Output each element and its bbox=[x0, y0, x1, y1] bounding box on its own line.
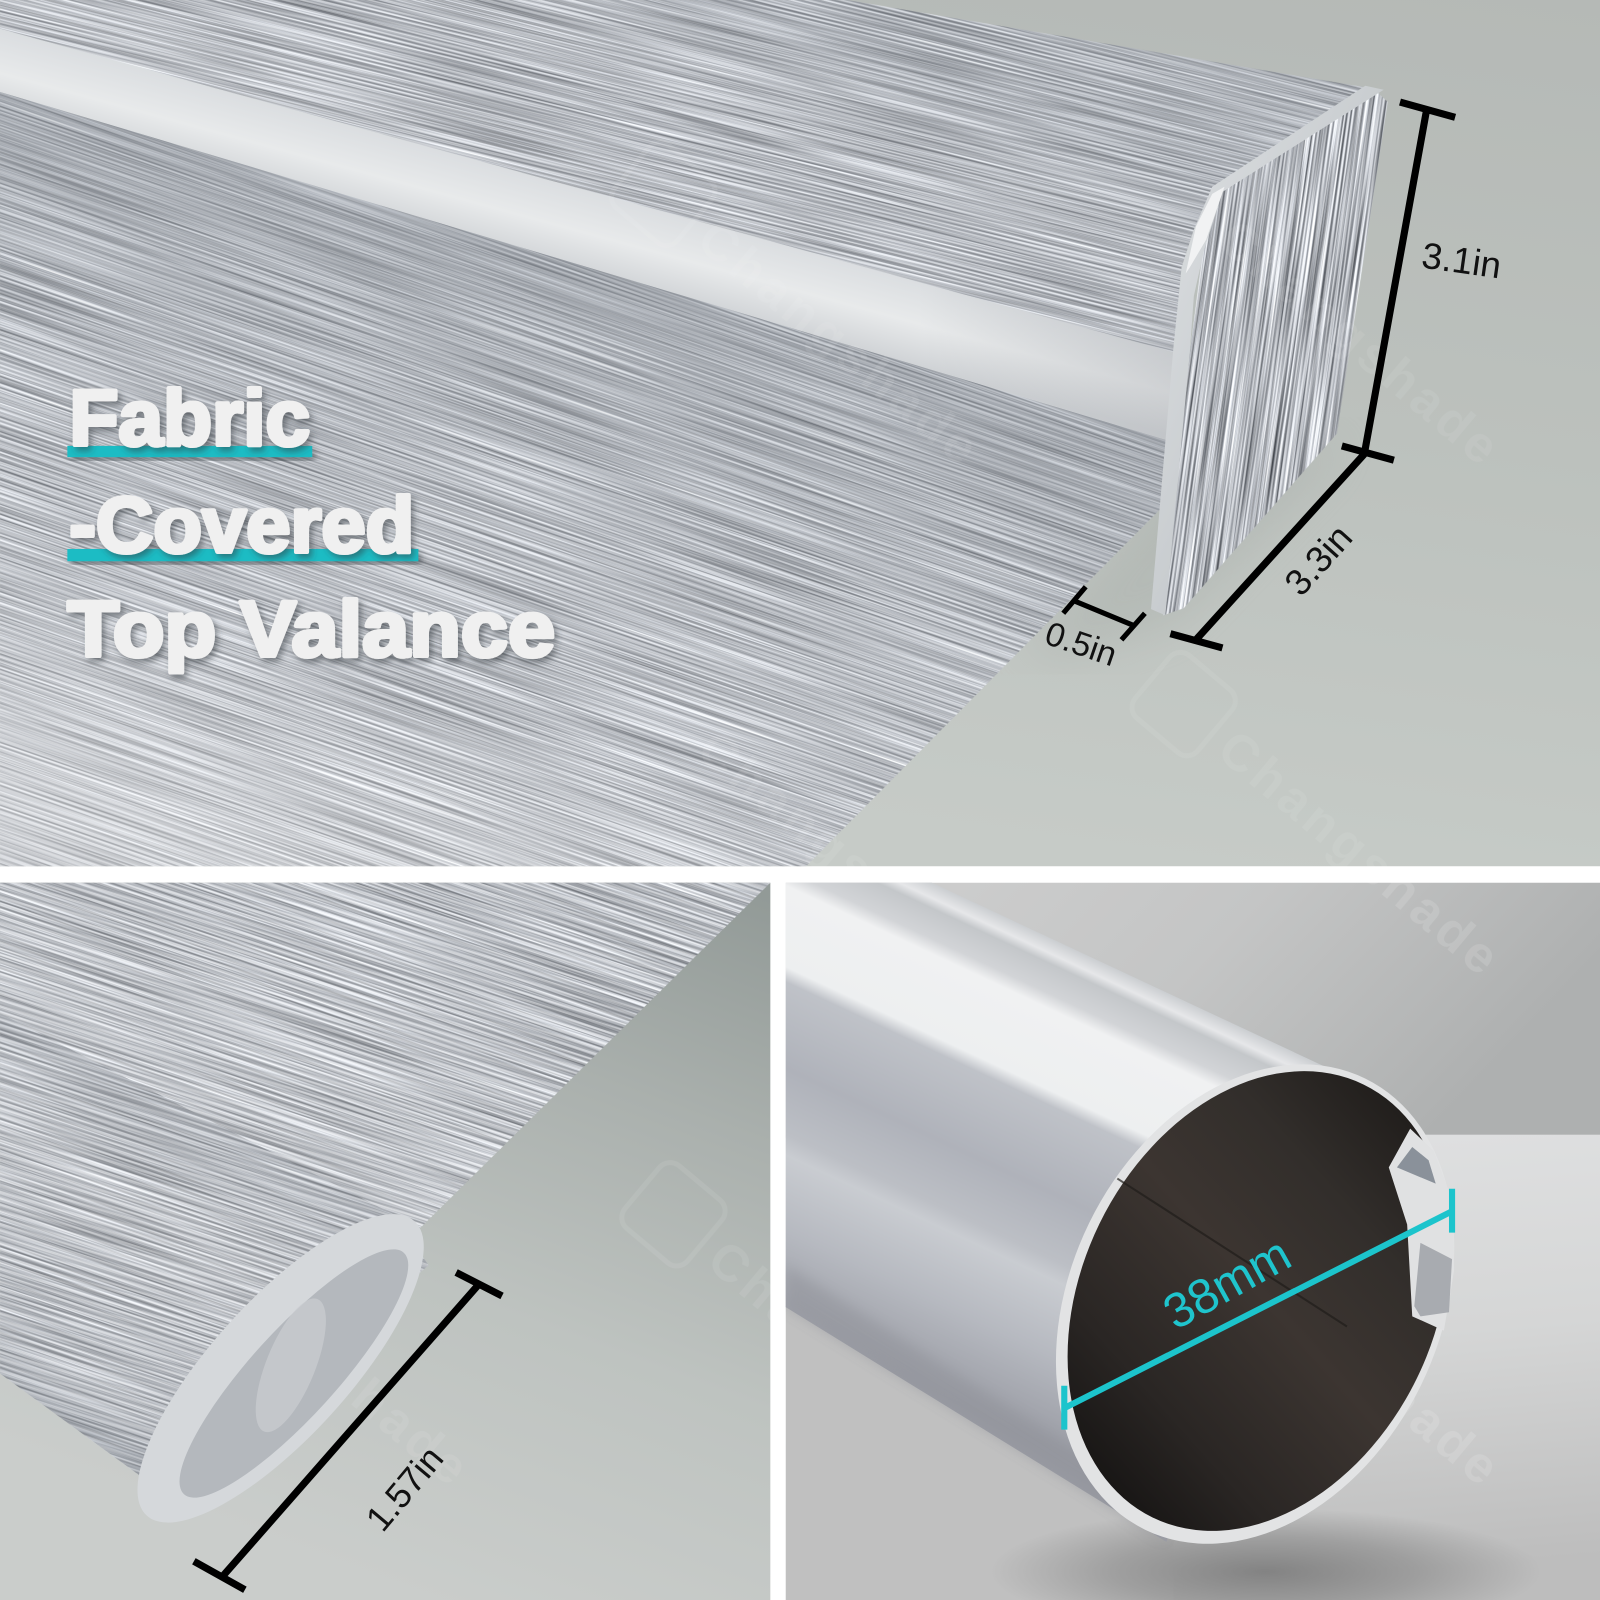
tube mouth bbox=[979, 998, 1531, 1600]
valance end side panel bbox=[1163, 93, 1388, 616]
white roller tube bbox=[0, 29, 1184, 441]
underline: Covered bbox=[67, 549, 418, 561]
watermark: top panel bbox=[614, 167, 1349, 774]
valance fabric front bbox=[0, 0, 1367, 382]
floor backdrop bbox=[786, 1135, 1600, 1600]
watermark: top panel: Changshade bbox=[1208, 209, 1510, 475]
cap feather reflection bbox=[241, 1290, 340, 1441]
dimension: 3.3in: 3.3in bbox=[1276, 517, 1360, 603]
rolled fabric bbox=[0, 1014, 428, 1475]
backdrop bbox=[0, 0, 1600, 866]
dimension: 3.1in: 3.1in bbox=[1419, 235, 1504, 286]
inner dark bore bbox=[994, 1007, 1522, 1595]
panel: 38mm aluminium tube bbox=[786, 719, 1600, 1600]
cap rim bbox=[138, 1214, 424, 1522]
dimension: 1.57in bbox=[194, 1272, 502, 1590]
clear plastic end strip bbox=[1151, 86, 1384, 615]
watermark: top panel: Changshade bbox=[1208, 719, 1510, 986]
dimension: 3.3in bbox=[1170, 454, 1364, 648]
slot rib bbox=[1389, 1129, 1454, 1331]
cap inner face bbox=[152, 1224, 435, 1523]
watermark: bottom-right panel: Changshade bbox=[1208, 719, 1510, 986]
backdrop bbox=[0, 883, 770, 1600]
dimension: 0.5in: 0.5in bbox=[1040, 615, 1121, 674]
dimension: 0.5in bbox=[1046, 585, 1147, 666]
tube shaded lower edge bbox=[786, 1265, 1166, 1542]
heading: Fabric-Covered Top Valance bbox=[67, 374, 555, 673]
underline: Fabric bbox=[67, 446, 312, 457]
dimension: 3.1in bbox=[1342, 102, 1504, 460]
watermark: bottom-left panel: Changshade bbox=[177, 1229, 480, 1496]
slot rectangular opening bbox=[1414, 1243, 1452, 1316]
strip highlight bbox=[1186, 187, 1224, 273]
tube body bbox=[786, 883, 1329, 1542]
floor left tone bbox=[786, 1306, 1173, 1600]
slot triangle opening bbox=[1397, 1147, 1436, 1184]
watermark: top panel: Changshade bbox=[687, 209, 990, 475]
dimension: 38mm: 38mm bbox=[1155, 1227, 1300, 1340]
lower fabric sheet bbox=[0, 92, 1166, 866]
dimension: 38mm bbox=[1064, 1189, 1452, 1430]
inner reflection seam bbox=[1117, 1179, 1347, 1327]
dimension: 1.57in: 1.57in bbox=[358, 1439, 451, 1539]
watermark: bottom-right panel bbox=[1208, 719, 1510, 1496]
floor shadow bbox=[990, 1508, 1541, 1600]
wall backdrop bbox=[786, 883, 1600, 1138]
heading line 2: -Covered bbox=[69, 481, 414, 569]
roll end cap bbox=[138, 1214, 424, 1522]
heading line 1: Fabric bbox=[69, 374, 310, 462]
watermark: bottom-right panel: Changshade bbox=[1208, 1229, 1510, 1496]
flat fabric sheet bbox=[0, 882, 770, 1228]
watermark: top panel: Changshade bbox=[687, 719, 990, 986]
panel: bottom roller end bbox=[0, 882, 770, 1600]
heading line 3: Top Valance bbox=[67, 585, 555, 673]
outer rim bbox=[979, 998, 1531, 1600]
watermark: bottom-left panel: Changshade bbox=[698, 1229, 1000, 1496]
watermark: bottom-left panel bbox=[177, 1157, 1008, 1505]
floor shadow under end cap bbox=[1066, 514, 1159, 638]
panel: fabric-covered top valance bbox=[0, 0, 1600, 866]
